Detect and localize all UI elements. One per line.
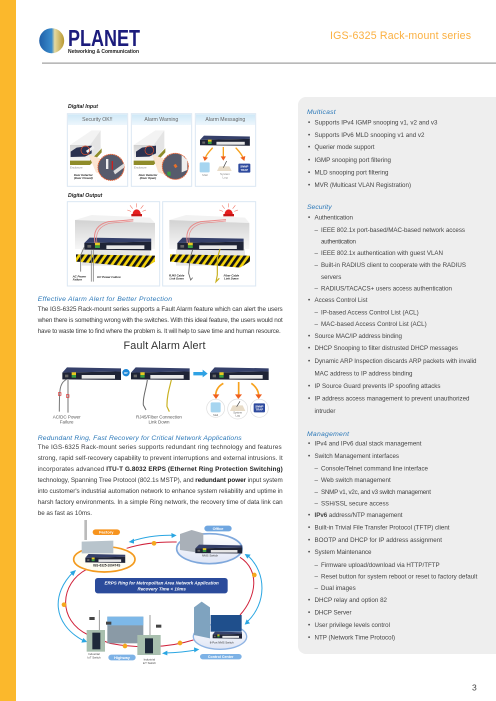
features: multicast: Supports IPv4 IGMP snooping v1, v2 and v3: [314, 120, 438, 127]
features: multicast: •: [308, 144, 310, 151]
caption: link down: RJ45/Fiber Connection: [136, 415, 182, 420]
features: management: Reset button for system reboot or reset to factory default: [321, 573, 478, 580]
text block: redundant ring: strong, rapid self-recovery capability to prevent interruptions and external intrusions. It: [38, 455, 283, 462]
logo: PLANET: PLANET: [68, 25, 140, 51]
features: security: –: [314, 227, 318, 234]
blue link arrows: [58, 535, 262, 653]
features: multicast: •: [308, 132, 310, 139]
heading: redundant ring: Redundant Ring, Fast Recovery for Critical Network Applications: [38, 435, 242, 442]
diagram: ERPS ring network: [58, 520, 262, 665]
features: security: IEEE 802.1x port-based/MAC-based network access: [321, 227, 465, 234]
features: security: •: [308, 358, 310, 365]
features: multicast: •: [308, 120, 310, 127]
diagram: alarm messaging panel: Log: [223, 175, 228, 179]
features: security: Access Control List: [314, 297, 368, 304]
heading: digital input: Digital Input: [68, 104, 98, 110]
features: management: •: [308, 549, 310, 556]
diagram: link down output panel: Fiber Cable: [224, 273, 239, 277]
diagram: power failure output panel: DC Power Failure: [97, 275, 121, 279]
diagram: alarm messaging panel: TRAP: [240, 168, 248, 172]
diagram: alarm warning panel: Enclosure: [134, 166, 147, 170]
factory node: Factory: [99, 530, 114, 535]
features: management: •: [308, 440, 310, 447]
features: multicast: MLD snooping port filtering: [314, 169, 389, 176]
features: security: Dynamic ARP Inspection discards ARP packets with invalid: [314, 358, 477, 365]
features: management: DHCP Server: [314, 609, 352, 616]
center banner: [95, 578, 228, 593]
diagram: link down output panel: Link Down: [170, 276, 184, 280]
features: multicast: •: [308, 169, 310, 176]
highway node: [87, 610, 161, 665]
alarm outputs: SNMP: [255, 404, 264, 408]
diagram: security OK panel: Door Detector: [74, 173, 94, 177]
features: security: –: [314, 285, 318, 292]
features: management: Firmware upload/download via HTTP/TFTP: [321, 562, 440, 569]
features: management: •: [308, 453, 310, 460]
alarm outputs: Mail: [213, 413, 219, 417]
heading: digital output: Digital Output: [68, 193, 103, 199]
features: security: –: [314, 250, 318, 257]
features: security: RADIUS/TACACS+ users access authentication: [321, 285, 453, 292]
features: multicast: Querier mode support: [314, 144, 375, 151]
power failure switch: [58, 367, 121, 413]
features: management: –: [314, 489, 318, 496]
features: security: Security: [307, 204, 332, 211]
control center node: 8-Port NMS Switch: [210, 641, 234, 645]
highway node: IoT Switch: [143, 661, 156, 665]
link down switch: [131, 367, 190, 412]
features: multicast: •: [308, 157, 310, 164]
diagram: alarm messaging panel: [195, 114, 256, 186]
diagram: alarm warning panel: Door Detector: [139, 173, 158, 177]
caption: link down: [136, 415, 182, 425]
diagram: security OK panel: Security OK!!: [82, 117, 113, 123]
diagram: alarm messaging panel: Alarm Messaging: [205, 117, 245, 123]
features: security: •: [308, 383, 310, 390]
features: management: Management: [307, 431, 350, 438]
features: security: MAC-based Access Control List (ACL): [321, 321, 427, 328]
diagram: alarm messaging panel: System: [220, 172, 230, 176]
alarm switch: [210, 367, 269, 380]
features: security: DHCP Snooping to filter distrusted DHCP messages: [314, 345, 458, 352]
caption: power failure: [53, 415, 81, 425]
features: management: SSH/SSL secure access: [321, 500, 389, 507]
or badge: [122, 369, 130, 376]
features: management: –: [314, 573, 318, 580]
caption: link down: Link Down: [149, 420, 170, 425]
alarm outputs: [207, 382, 268, 419]
heading: alarm alert: Effective Alarm Alert for Better Protection: [38, 296, 172, 303]
features: management: IPv4 and IPv6 dual stack management: [314, 440, 422, 447]
features: management: Dual images: [321, 585, 356, 592]
alarm outputs: Log: [235, 414, 240, 418]
features: multicast: Multicast: [307, 109, 337, 116]
features: management: Web switch management: [321, 477, 391, 484]
diagram: link down output panel: Link Down: [224, 277, 239, 281]
features: management: NTP (Network Time Protocol): [314, 634, 395, 641]
features: security: Built-in RADIUS client to cooperate with the RADIUS: [321, 262, 466, 269]
diagram: alarm messaging panel: SNMP: [240, 165, 249, 169]
features: management: Built-in Trivial File Transfer Protocol (TFTP) client: [314, 524, 450, 531]
heading: fault alarm alert: Fault Alarm Alert: [124, 340, 206, 352]
features: management: BOOTP and DHCP for IP address assignment: [314, 537, 442, 544]
features: management: –: [314, 562, 318, 569]
text block: redundant ring: The IGS-6325 Rack-mount series supports redundant ring technology and features: [38, 444, 282, 451]
features: security: IP-based Access Control List (ACL): [321, 309, 419, 316]
diagram: security OK panel: Enclosure: [70, 166, 83, 170]
center banner: ERPS Ring for Metropolitan Area Network Application: [105, 580, 219, 585]
caption: power failure: AC/DC Power: [53, 415, 81, 420]
features: management: DHCP relay and option 82: [314, 597, 388, 604]
text block: redundant ring: [38, 444, 283, 517]
features: management: •: [308, 609, 310, 616]
features: security: –: [314, 321, 318, 328]
text block: alarm alert: [37, 306, 283, 335]
text block: alarm alert: when there is something wrong with the switches. With this ideal feature, the users would not: [37, 317, 283, 324]
or badge: or: [124, 371, 128, 375]
features: multicast: [307, 109, 438, 189]
alarm outputs: System: [233, 411, 243, 415]
highway node: IoT Switch: [87, 655, 101, 659]
features: security: Source MAC/IP address binding: [314, 333, 403, 340]
diagram: link down output panel: RJ45 Cable: [169, 273, 185, 277]
office node: Office: [213, 527, 223, 531]
highway node: Industrial: [144, 658, 155, 662]
features: security: •: [308, 395, 310, 402]
features: management: •: [308, 634, 310, 641]
features: security: MAC address to IP address binding: [314, 370, 413, 377]
diagram: alarm messaging panel: Mail: [202, 173, 208, 177]
features: security: Authentication: [314, 214, 354, 221]
diagram: alarm warning panel: [131, 114, 192, 186]
text block: redundant ring: harsh factory environments. In a simple Ring network, the recovery time of data link can: [38, 499, 283, 506]
highway node: Highway: [114, 656, 131, 660]
factory node: IGS-6325-1004T4S: [93, 563, 120, 567]
features: multicast: MVR (Multicast VLAN Registration): [314, 182, 411, 189]
features: management: •: [308, 622, 310, 629]
features: management: System Maintenance: [314, 549, 372, 556]
features: management: –: [314, 585, 318, 592]
features: multicast: IGMP snooping port filtering: [314, 157, 392, 164]
features: security: IP Source Guard prevents IP spoofing attacks: [314, 383, 440, 390]
features: security: authentication: [321, 238, 357, 246]
features: management: Console/Telnet command line interface: [321, 465, 429, 472]
logo: PLANET: Networking & Communication: [68, 49, 139, 55]
left accent bar: [0, 0, 16, 701]
features: security: •: [308, 345, 310, 352]
features: management: •: [308, 524, 310, 531]
features: security: intruder: [314, 408, 335, 415]
panel: features background: [298, 97, 496, 654]
text block: redundant ring: into customer's industrial automation network to enhance system reliability and uptime in: [38, 488, 283, 495]
diagram: power failure output panel: [67, 202, 160, 286]
red ring: [66, 542, 254, 647]
features: management: SNMP v1, v2c, and v3 switch management: [321, 489, 431, 496]
control center node: [193, 602, 247, 659]
highway node: Industrial: [88, 652, 100, 656]
page number: 3: [472, 682, 477, 692]
features: security: •: [308, 297, 310, 304]
features: management: •: [308, 597, 310, 604]
diagram: link down output panel: [163, 202, 256, 286]
diagram: alarm warning panel: Alarm Warning: [144, 117, 178, 123]
diagram: security OK panel: (Door Closed): [74, 176, 93, 180]
text block: redundant ring: be as fast as 10ms.: [38, 510, 92, 517]
logo: PLANET: [39, 25, 140, 55]
features: security: IP address access management to prevent unauthorized: [314, 395, 470, 402]
header rule: [42, 63, 496, 64]
diagram: alarm warning panel: (Door Open): [140, 176, 156, 180]
features: management: –: [314, 500, 318, 507]
center banner: Recovery Time < 10ms: [137, 587, 186, 592]
control center node: Control Center: [208, 655, 234, 659]
text block: redundant ring: technology, Spanning Tree Protocol (802.1s MSTP), and redundant power input system: [38, 477, 283, 484]
office node: [177, 526, 242, 564]
caption: power failure: Failure: [60, 420, 74, 425]
factory node: [74, 520, 135, 572]
ring nodes: [62, 541, 257, 648]
alarm outputs: TRAP: [255, 408, 263, 412]
features: management: •: [308, 512, 310, 519]
features: management: IPv6 address/NTP management: [314, 512, 403, 519]
features: management: –: [314, 477, 318, 484]
features: management: •: [308, 537, 310, 544]
diagram: power failure output panel: AC Power: [72, 274, 87, 278]
text block: alarm alert: The IGS-6325 Rack-mount series supports a Fault Alarm feature which can alert the users: [38, 306, 283, 313]
diagram: security OK panel: [67, 114, 128, 186]
features: security: IEEE 802.1x authentication with guest VLAN: [321, 250, 443, 257]
features: security: [307, 204, 477, 415]
features: security: •: [308, 214, 310, 221]
features: security: –: [314, 262, 318, 269]
features: management: User privilege levels control: [314, 622, 390, 629]
features: management: –: [314, 465, 318, 472]
features: multicast: Supports IPv6 MLD snooping v1 and v2: [314, 132, 425, 139]
text block: alarm alert: have to waste time to find where the problem is. It will help to save time and human resource.: [38, 328, 281, 335]
features: security: –: [314, 309, 318, 316]
features: security: •: [308, 333, 310, 340]
text block: redundant ring: incorporates advanced ITU-T G.8032 ERPS (Ethernet Ring Protection Switching): [38, 466, 283, 473]
diagram: power failure output panel: Failure: [73, 277, 82, 281]
features: security: servers: [321, 274, 341, 281]
features: multicast: •: [308, 182, 310, 189]
features: management: [307, 431, 478, 641]
diagram: fault alarm flow: [53, 367, 269, 425]
header title: IGS-6325 Rack-mount series: [330, 30, 471, 42]
arrow: [193, 370, 208, 377]
features: management: Switch Management interfaces: [314, 453, 399, 460]
office node: NMS Switch: [202, 553, 218, 557]
